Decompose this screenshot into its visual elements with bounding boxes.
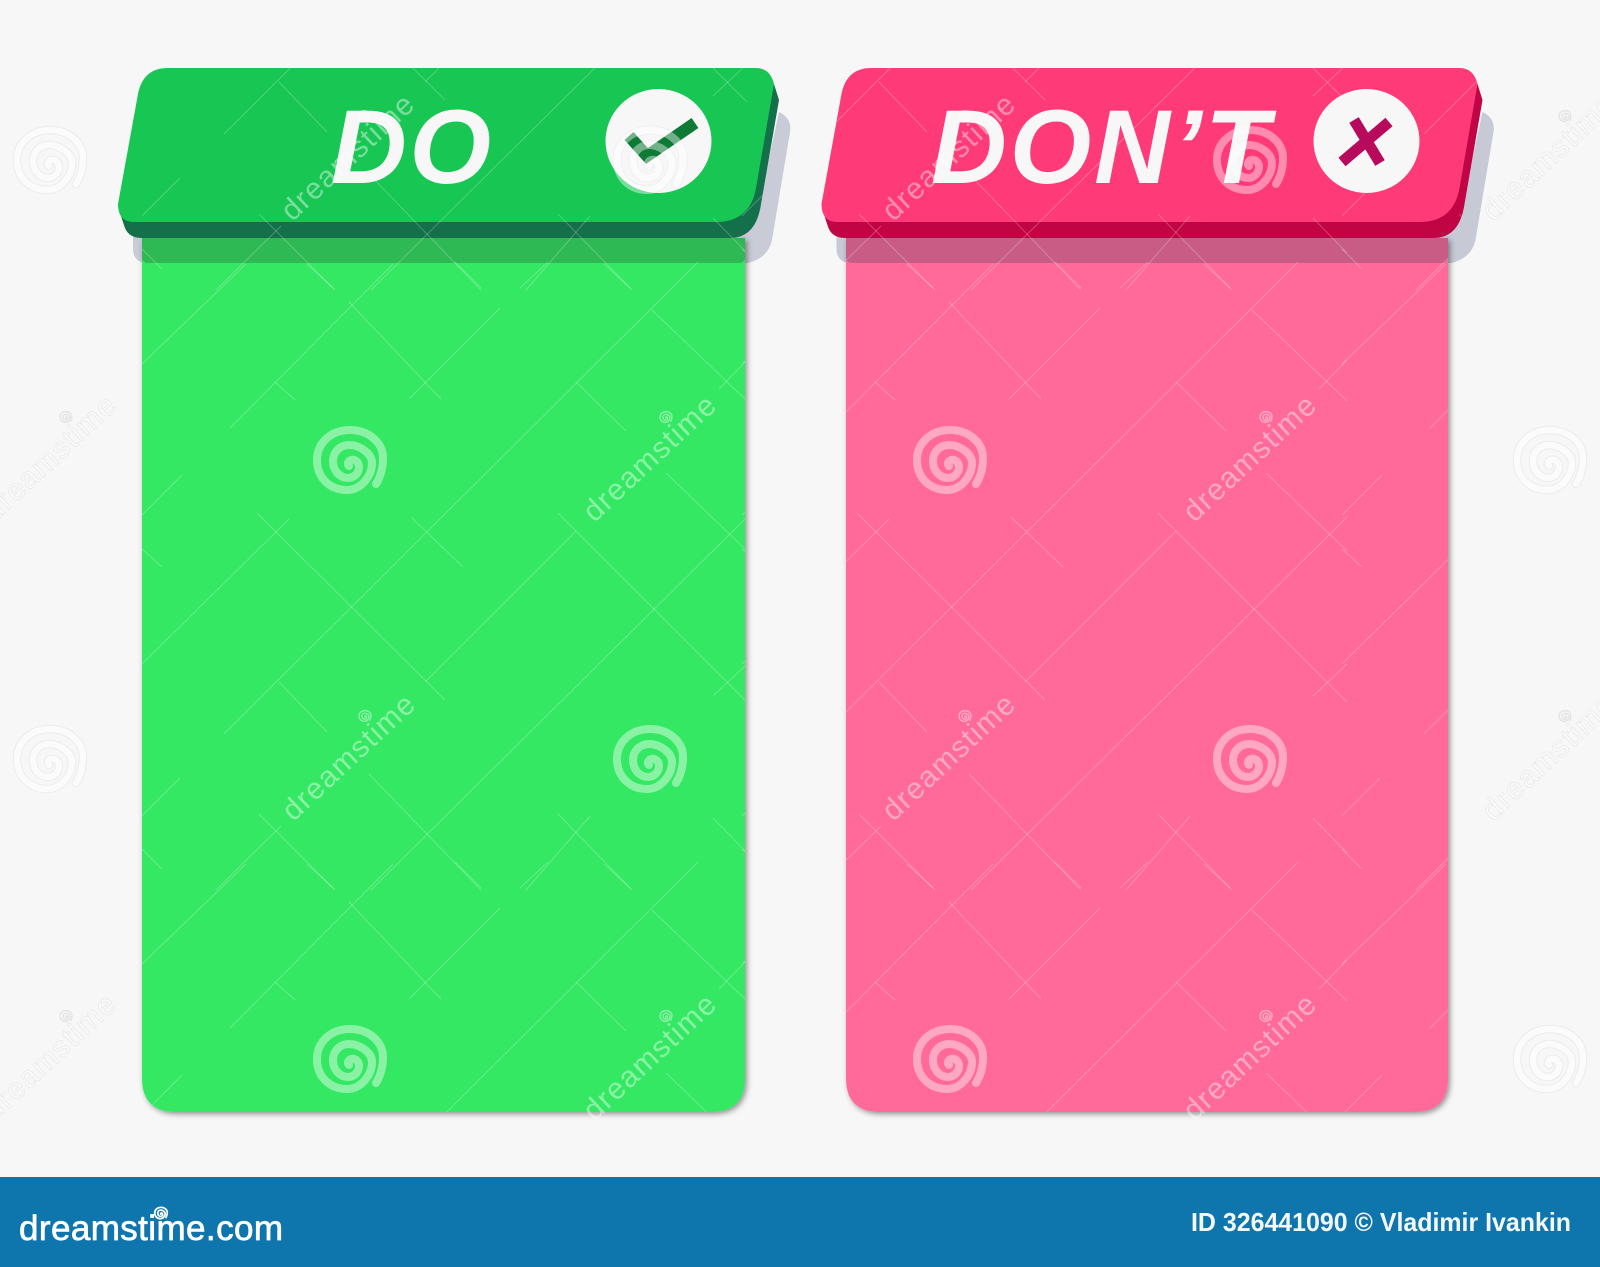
watermark wordmarks on panels: dreamstime: [276, 688, 422, 827]
watermark wordmarks on panels: dreamstime: [876, 88, 1022, 227]
watermark wordmarks on panels: dreamstime: [577, 988, 723, 1127]
icon: check mark badge: [606, 89, 712, 193]
header extrusion: do: [118, 84, 779, 238]
watermark wordmark spirals on background: [60, 111, 1571, 1021]
watermark wordmarks on panels: dreamstime: [275, 88, 421, 227]
content card: do: [142, 238, 745, 1112]
footer bar: [0, 1177, 1600, 1267]
panel: do: [118, 68, 790, 1112]
header extrusion: don't: [822, 84, 1482, 238]
panel shadow: don't: [836, 112, 1494, 263]
watermark spirals on panels: [317, 130, 1283, 1089]
heading: do: DO: [331, 89, 491, 206]
header face: do: [118, 68, 774, 222]
watermark lines: [142, 68, 1477, 1112]
watermark wordmarks on panels: [275, 88, 1323, 1127]
icon: cross badge: [1314, 89, 1420, 193]
watermark wordmark spirals on panels: [358, 111, 1272, 1021]
header cast shadow: don't: [846, 238, 1448, 263]
watermark spirals on background: [17, 130, 1583, 1089]
watermark wordmarks on panels: dreamstime: [577, 389, 723, 528]
watermark wordmarks on panels: dreamstime: [1177, 389, 1323, 528]
header cast shadow: do: [142, 238, 745, 263]
panel: don't: [822, 68, 1494, 1112]
watermark wordmarks on panels: dreamstime: [876, 688, 1022, 827]
image id and credit: ID 326441090 © Vladimir Ivankin: [1191, 1207, 1571, 1237]
header face: don't: [822, 68, 1478, 222]
footer logo: dreamstime.com: [19, 1209, 283, 1248]
heading: don't: DON’T: [931, 89, 1277, 206]
content card: don't: [846, 238, 1448, 1112]
watermark wordmarks on panels: dreamstime: [1177, 988, 1323, 1127]
panel shadow: do: [133, 112, 790, 263]
